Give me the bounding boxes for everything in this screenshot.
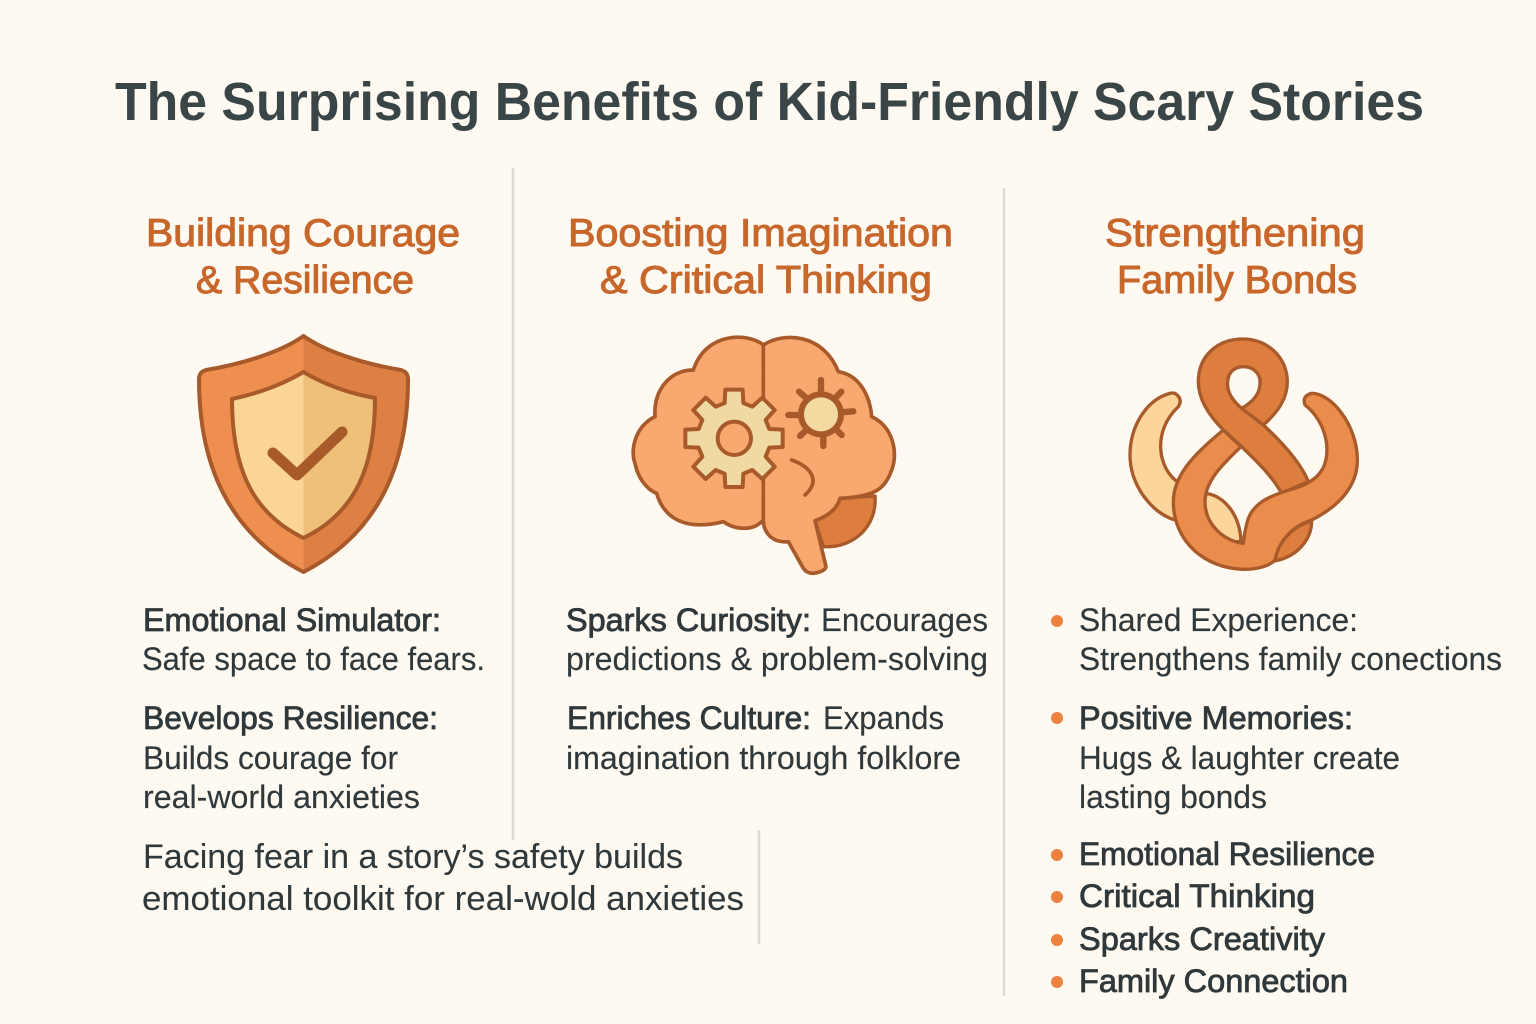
icon: brain with gear and sun [633, 337, 894, 573]
bullet: shared experience: Shared Experience: [1079, 602, 1358, 638]
text: enriches culture: Expands [823, 700, 944, 736]
callout: facing fear: emotional toolkit for real-wold anxieties [142, 880, 744, 918]
heading: strengthening family bonds [1105, 212, 1365, 302]
bullet: positive memories: lasting bonds [1079, 779, 1267, 815]
heading: strengthening family bonds: Strengthening [1105, 212, 1365, 255]
icon: intertwined ribbon knot [1130, 339, 1357, 569]
callout: facing fear [142, 838, 744, 918]
bullet: shared experience: Strengthens family conections [1079, 641, 1502, 677]
callout: facing fear: Facing fear in a story’s safety builds [143, 838, 683, 876]
text: sparks curiosity: Sparks Curiosity: [566, 602, 811, 638]
bullet: shared experience [1051, 602, 1502, 677]
bullet: sparks creativity: Sparks Creativity [1079, 921, 1325, 957]
bullet: positive memories: Positive Memories: [1079, 700, 1353, 736]
text: develops resilience: Builds courage for [143, 740, 398, 776]
text: emotional simulator: Emotional Simulator: [143, 602, 441, 638]
bullet: emotional resilience: Emotional Resilience [1079, 836, 1375, 872]
heading: building courage: Building Courage [146, 212, 460, 255]
heading: building courage [146, 212, 460, 302]
panel: building courage and resilience [142, 212, 744, 918]
bullet: family connection: Family Connection [1079, 963, 1348, 999]
text: enriches culture [566, 700, 961, 776]
text: develops resilience: Bevelops Resilience: [143, 700, 438, 736]
panel: strengthening family bonds [1051, 212, 1502, 999]
text: develops resilience: real-world anxieties [143, 779, 420, 815]
heading: strengthening family bonds: Family Bonds [1117, 259, 1357, 302]
bullet: positive memories [1051, 700, 1400, 815]
panel: boosting imagination and critical thinking [566, 212, 988, 776]
title: The Surprising Benefits of Kid-Friendly Scary Stories [115, 72, 1424, 132]
text: emotional simulator: Safe space to face fears. [142, 641, 485, 677]
text: enriches culture: Enriches Culture: [567, 700, 811, 736]
heading: boosting imagination [568, 212, 953, 302]
bullet: positive memories: Hugs & laughter create [1079, 740, 1400, 776]
heading: boosting imagination: & Critical Thinking [600, 259, 932, 302]
text: sparks curiosity: predictions & problem-solving [566, 641, 988, 677]
heading: building courage: & Resilience [196, 259, 414, 302]
icon: shield with check mark [199, 336, 408, 572]
text: enriches culture: imagination through folklore [566, 740, 961, 776]
text: sparks curiosity: Encourages [821, 602, 988, 638]
text: sparks curiosity [566, 602, 988, 677]
text: develops resilience [143, 700, 438, 815]
bullet: critical thinking: Critical Thinking [1079, 878, 1315, 914]
text: emotional simulator [142, 602, 485, 677]
heading: boosting imagination: Boosting Imagination [568, 212, 953, 255]
